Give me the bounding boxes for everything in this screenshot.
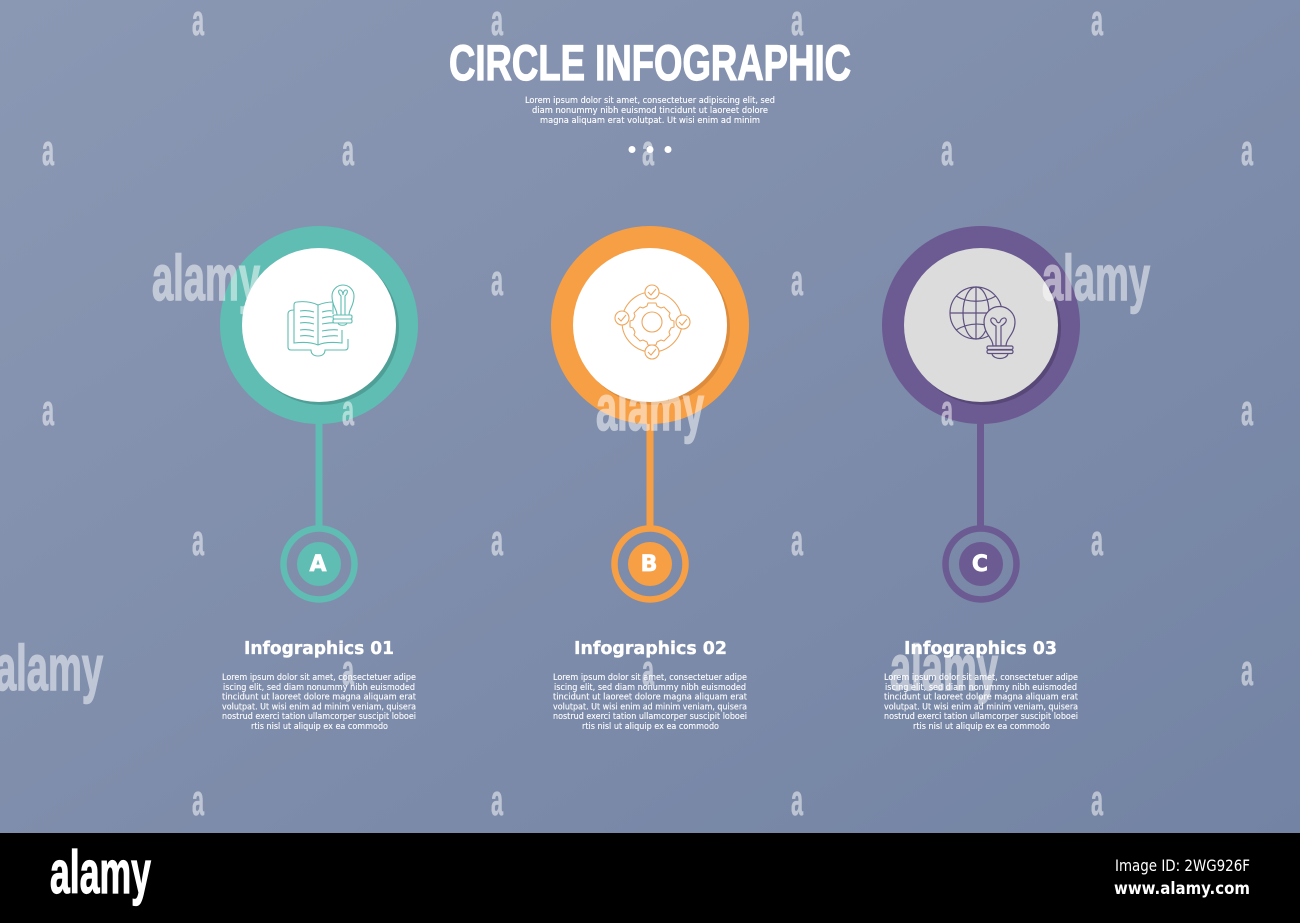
body text C: rtis nisl ut aliquip ex ea commodo [913, 722, 1050, 732]
body text A: rtis nisl ut aliquip ex ea commodo [251, 722, 388, 732]
watermark overlay: a [1241, 386, 1253, 435]
footer logo: alamy [50, 839, 151, 906]
body text C: Lorem ipsum dolor sit amet, consectetuer adipe [884, 673, 1078, 683]
watermark overlay: a [192, 776, 204, 825]
badge B [614, 528, 686, 600]
subtitle text: magna aliquam erat volutpat. Ut wisi enim ad minim [540, 116, 760, 126]
watermark overlay: a [791, 516, 803, 565]
large ring B [551, 226, 749, 424]
body text A: iscing elit, sed diam nonummy nibh euismoded [223, 683, 415, 693]
icon: globe and light bulb [950, 287, 1015, 358]
watermark overlay: a [491, 776, 503, 825]
badge B: B [641, 552, 657, 577]
footer bar [0, 833, 1300, 923]
icon: book and light bulb [288, 285, 354, 356]
heading C: Infographics 03 [904, 638, 1057, 659]
subtitle text: diam nonummy nibh euismod tincidunt ut laoreet dolore [532, 106, 768, 116]
watermark overlay: a [491, 256, 503, 305]
body text B: rtis nisl ut aliquip ex ea commodo [582, 722, 719, 732]
body text A [222, 673, 417, 732]
body text A: volutpat. Ut wisi enim ad minim veniam, quisera [222, 702, 416, 712]
body text C: tincidunt ut laoreet dolore magna aliquam erat [884, 692, 1079, 702]
watermark overlay: a [791, 776, 803, 825]
watermark overlay: a [941, 386, 953, 435]
watermark overlay: alamy [152, 242, 260, 314]
body text B: tincidunt ut laoreet dolore magna aliquam erat [553, 692, 748, 702]
body text C: volutpat. Ut wisi enim ad minim veniam, quisera [884, 702, 1078, 712]
body text B: Lorem ipsum dolor sit amet, consectetuer adipe [553, 673, 747, 683]
icon: gear with check marks [615, 285, 690, 359]
heading B: Infographics 02 [574, 638, 727, 659]
watermark overlay: a [342, 386, 354, 435]
watermark overlay: alamy [1042, 242, 1150, 314]
body text A: tincidunt ut laoreet dolore magna aliquam erat [222, 692, 417, 702]
watermark overlay: a [1091, 776, 1103, 825]
heading A: Infographics 01 [244, 638, 394, 659]
website: www.alamy.com [1114, 879, 1250, 899]
title: CIRCLE INFOGRAPHIC [449, 35, 851, 91]
watermark overlay: a [192, 516, 204, 565]
connector line C [977, 415, 984, 530]
watermark overlay: a [42, 126, 54, 175]
large ring A [220, 226, 418, 424]
watermark overlay: a [342, 126, 354, 175]
watermark overlay: a [491, 516, 503, 565]
watermark overlay: a [1241, 646, 1253, 695]
watermark overlay: alamy [0, 632, 103, 704]
subtitle text [525, 96, 775, 126]
panel: infographic A [220, 226, 418, 732]
watermark overlay: a [642, 646, 654, 695]
inner circle B with shadow [573, 248, 730, 405]
watermark overlay: a [342, 646, 354, 695]
three dots divider [628, 146, 672, 153]
watermark overlay: a [1241, 126, 1253, 175]
body text C: iscing elit, sed diam nonummy nibh euismoded [885, 683, 1077, 693]
watermark overlay: a [1091, 516, 1103, 565]
badge A: A [309, 552, 327, 577]
body text B: volutpat. Ut wisi enim ad minim veniam, quisera [553, 702, 747, 712]
watermark overlay: a [791, 256, 803, 305]
body text B: nostrud exerci tation ullamcorper suscipit loboei [553, 712, 747, 722]
watermark overlay: a [642, 126, 654, 175]
body text C: nostrud exerci tation ullamcorper suscipit loboei [884, 712, 1078, 722]
watermark overlay: alamy [596, 372, 704, 444]
watermark overlay: alamy [890, 632, 998, 704]
body text B [553, 673, 748, 732]
body text A: Lorem ipsum dolor sit amet, consectetuer adipe [222, 673, 416, 683]
subtitle text: Lorem ipsum dolor sit amet, consectetuer adipiscing elit, sed [525, 96, 775, 106]
inner circle C with shadow [904, 248, 1061, 405]
badge C [946, 528, 1016, 600]
connector line A [316, 415, 322, 530]
watermark overlay: a [941, 126, 953, 175]
connector line B [646, 415, 654, 530]
panel: infographic B [551, 226, 749, 732]
body text B: iscing elit, sed diam nonummy nibh euismoded [554, 683, 746, 693]
watermark overlay: a [42, 386, 54, 435]
panel: infographic C [882, 226, 1080, 732]
body text A: nostrud exerci tation ullamcorper suscipit loboei [222, 712, 416, 722]
badge A [284, 528, 354, 600]
image id: Image ID: 2WG926F [1115, 856, 1250, 875]
badge C: C [972, 552, 988, 577]
inner circle A with shadow [242, 248, 399, 405]
large ring C [882, 226, 1080, 424]
body text C [884, 673, 1079, 732]
